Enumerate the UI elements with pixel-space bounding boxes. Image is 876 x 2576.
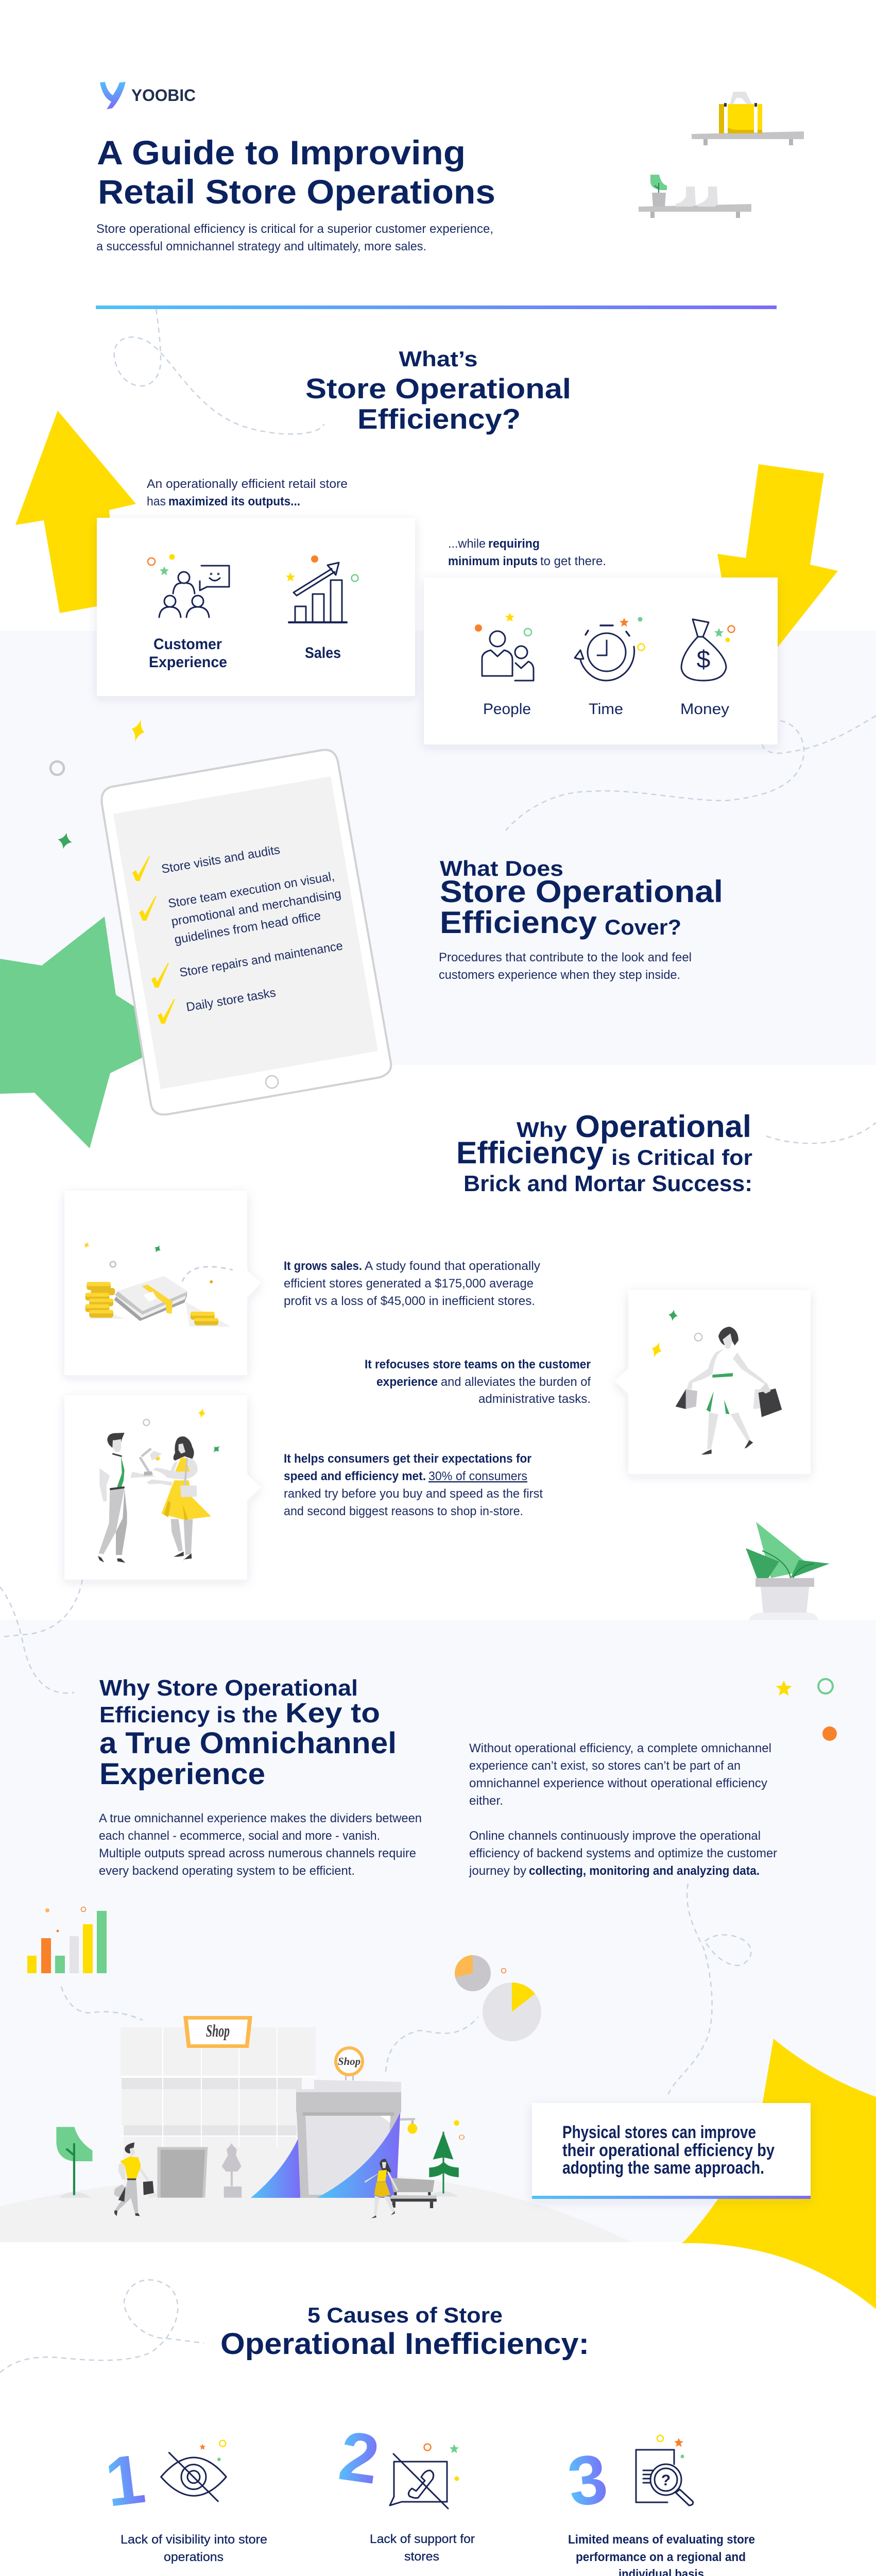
heading: why critical: is Critical for bbox=[611, 1145, 752, 1170]
heading: what does it cover: Store Operational bbox=[440, 874, 723, 909]
panel: shopper illustration bbox=[614, 1290, 811, 1474]
text: right paragraphs: omnichannel experience without operational efficiency bbox=[469, 1776, 767, 1790]
text: grows sales: efficient stores generated a $175,000 average bbox=[284, 1277, 534, 1291]
round sign: Shop bbox=[338, 2055, 360, 2067]
icon: people bbox=[475, 613, 534, 681]
heading: 5 causes bbox=[220, 2303, 589, 2361]
text: right paragraphs: efficiency of backend systems and optimize the customer bbox=[469, 1846, 777, 1860]
shop sign: Shop bbox=[206, 2022, 230, 2041]
text: refocus teams: It refocuses store teams on the customer bbox=[365, 1358, 591, 1371]
dashed lines: left of section four bbox=[0, 1580, 82, 1693]
text: grows sales: It grows sales. bbox=[284, 1259, 362, 1273]
text: inputs: minimum inputs bbox=[448, 554, 538, 568]
heading: key to omnichannel: a True Omnichannel bbox=[99, 1726, 397, 1760]
right building bbox=[296, 2080, 401, 2112]
title bbox=[97, 133, 495, 211]
text: grows sales bbox=[284, 1259, 540, 1308]
cause 3: limited evaluation bbox=[564, 2435, 755, 2576]
text: inputs bbox=[448, 537, 606, 568]
text: helps consumers: 30% of consumers bbox=[428, 1469, 527, 1483]
text: Lack of visibility into store bbox=[121, 2533, 267, 2547]
text: stores bbox=[404, 2550, 439, 2564]
text: helps consumers: speed and efficiency met. bbox=[284, 1469, 426, 1483]
icon: customer experience bbox=[148, 554, 229, 617]
text: helps consumers: and second biggest reasons to shop in-store. bbox=[284, 1504, 523, 1518]
text: procedures: Procedures that contribute to the look and feel bbox=[439, 951, 692, 964]
text: helps consumers bbox=[284, 1452, 543, 1518]
text: procedures bbox=[439, 951, 692, 982]
illustration: tablet checklist: Store repairs and maintenance bbox=[179, 939, 344, 980]
heading: key to omnichannel: Efficiency is the bbox=[99, 1702, 278, 1727]
illustration: tablet checklist: promotional and merchandising bbox=[170, 887, 342, 929]
title: A Guide to Improving bbox=[97, 133, 466, 172]
text: operations bbox=[164, 2550, 224, 2564]
text: Limited means of evaluating store bbox=[568, 2533, 755, 2547]
main building bbox=[121, 2027, 317, 2199]
text: Lack of support for bbox=[370, 2532, 475, 2546]
dashed line right bbox=[506, 716, 876, 831]
divider bbox=[96, 306, 777, 309]
text: grows sales: profit vs a loss of $45,000 in inefficient stores. bbox=[284, 1294, 535, 1308]
text: performance on a regional and bbox=[576, 2550, 746, 2564]
cause 1: lack of visibility bbox=[101, 2439, 267, 2564]
text: helps consumers: It helps consumers get their expectations for bbox=[284, 1452, 531, 1466]
heading: what does it cover: Cover? bbox=[605, 915, 681, 939]
labels: people, time, money: Money bbox=[680, 701, 729, 718]
text bbox=[370, 2532, 475, 2564]
callout: adopting the same approach. bbox=[562, 2158, 764, 2178]
text bbox=[568, 2533, 755, 2576]
illustration: shelves with bag, plant and boots bbox=[639, 92, 804, 218]
text: left paragraph: A true omnichannel experience makes the dividers between bbox=[99, 1811, 422, 1825]
heading: key to omnichannel: Experience bbox=[99, 1757, 265, 1791]
heading: what does it cover: Efficiency bbox=[440, 905, 597, 940]
heading: why critical: Operational bbox=[575, 1109, 751, 1144]
title: Retail Store Operations bbox=[98, 173, 495, 211]
number 3: 3 bbox=[564, 2439, 611, 2521]
heading: what does it cover bbox=[440, 856, 723, 940]
heading: why critical: Efficiency bbox=[456, 1136, 604, 1170]
text: left paragraph: Multiple outputs spread across numerous channels require bbox=[99, 1846, 416, 1860]
yellow arrow down bbox=[717, 464, 838, 693]
callout: Physical stores can improve bbox=[562, 2123, 756, 2142]
label: sales: Sales bbox=[305, 645, 341, 662]
heading: why critical bbox=[456, 1109, 752, 1196]
label: customer experience bbox=[149, 636, 227, 671]
panel: inputs bbox=[424, 578, 778, 744]
heading: what's store operational efficiency: Store Operational bbox=[305, 372, 571, 404]
yellow corner shape bbox=[681, 2039, 876, 2309]
illustration: tablet checklist: Daily store tasks bbox=[185, 986, 277, 1014]
labels: people, time, money: People bbox=[483, 701, 531, 718]
heading: key to omnichannel: Key to bbox=[285, 1698, 380, 1728]
number 2: 2 bbox=[335, 2416, 384, 2499]
bar chart bbox=[27, 1907, 107, 1973]
shop sign bbox=[183, 2016, 252, 2048]
green star shape bbox=[0, 917, 145, 1148]
illustration: store associate and customer bbox=[98, 1419, 222, 1563]
icon: crossed eye bbox=[161, 2441, 226, 2501]
icon: money: $ bbox=[697, 646, 710, 673]
text: refocus teams: and alleviates the burden of bbox=[441, 1375, 591, 1389]
heading: what's store operational efficiency: Efficiency? bbox=[357, 403, 521, 435]
text: refocus teams: administrative tasks. bbox=[478, 1392, 591, 1406]
text: helps consumers: ranked try before you buy and speed as the first bbox=[284, 1487, 543, 1501]
heading: what's store operational efficiency: What’s bbox=[399, 347, 478, 371]
dashed lines around store bbox=[61, 1884, 751, 2096]
heading: why critical: Why bbox=[517, 1117, 568, 1142]
decoration: sparkles bbox=[649, 1309, 678, 1359]
label: customer experience: Experience bbox=[149, 654, 227, 671]
text: refocus teams bbox=[365, 1358, 591, 1406]
text: left paragraph bbox=[99, 1811, 422, 1878]
labels: people, time, money bbox=[483, 701, 729, 718]
intro text: Store operational efficiency is critical for a superior customer experience, bbox=[96, 222, 493, 236]
icon: money bbox=[681, 619, 734, 681]
storefront, door and figures bbox=[56, 2112, 464, 2218]
heading: key to omnichannel: Why Store Operational bbox=[99, 1675, 358, 1701]
icon: document and magnifier bbox=[636, 2435, 693, 2505]
pie charts bbox=[455, 1955, 541, 2041]
illustration: tablet checklist bbox=[101, 750, 391, 1114]
intro text bbox=[96, 222, 493, 253]
ground hill bbox=[0, 2172, 631, 2242]
yellow arrow up bbox=[15, 411, 136, 613]
illustration: store building bbox=[56, 2016, 464, 2218]
illustration: tablet checklist: Store team execution on visual, bbox=[167, 869, 336, 911]
illustration: tablet checklist: Store visits and audits bbox=[161, 843, 281, 876]
heading: what does it cover: What Does bbox=[440, 856, 563, 880]
round sign bbox=[336, 2048, 363, 2080]
icon: document and magnifier: ? bbox=[661, 2472, 671, 2489]
intro text: a successful omnichannel strategy and ultimately, more sales. bbox=[96, 240, 426, 253]
decoration: yellow sparkle bbox=[197, 1408, 207, 1419]
labels: people, time, money: Time bbox=[589, 701, 623, 718]
cause 2: lack of support bbox=[335, 2416, 475, 2564]
decoration: star, ring, dot bbox=[776, 1679, 837, 1741]
section background: omnichannel bbox=[0, 1620, 876, 2242]
text: right paragraphs: journey by bbox=[469, 1864, 526, 1878]
text: inputs: to get there. bbox=[540, 554, 606, 568]
logo: YOOBIC bbox=[131, 86, 196, 105]
text: inputs: requiring bbox=[488, 537, 540, 551]
illustration: coins and banknotes bbox=[82, 1241, 233, 1327]
text: outputs: has bbox=[147, 495, 166, 509]
text: right paragraphs: Without operational efficiency, a complete omnichannel bbox=[469, 1741, 771, 1755]
text: right paragraphs: experience can’t exist, so stores can’t be part of an bbox=[469, 1759, 741, 1773]
heading: key to omnichannel bbox=[99, 1675, 397, 1791]
label: customer experience: Customer bbox=[153, 636, 222, 653]
panel: money illustration bbox=[64, 1191, 261, 1375]
illustration: woman with shopping bags bbox=[676, 1327, 782, 1454]
icon: crossed phone bbox=[390, 2444, 459, 2509]
number 1: 1 bbox=[101, 2439, 149, 2521]
text: left paragraph: each channel - ecommerce, social and more - vanish. bbox=[99, 1829, 380, 1843]
text: outputs: maximized its outputs... bbox=[168, 495, 300, 509]
text: inputs: ...while bbox=[448, 537, 486, 551]
dashed line with loop bbox=[114, 309, 324, 434]
text bbox=[121, 2533, 267, 2564]
logo bbox=[100, 82, 196, 109]
icon: time bbox=[575, 617, 645, 681]
panel: couple illustration bbox=[64, 1395, 261, 1580]
callout bbox=[532, 2103, 811, 2199]
text: right paragraphs: Online channels continuously improve the operational bbox=[469, 1829, 761, 1843]
heading: what's store operational efficiency bbox=[305, 347, 571, 435]
icon: sales bbox=[286, 555, 358, 622]
text: left paragraph: every backend operating system to be efficient. bbox=[99, 1864, 355, 1878]
text: right paragraphs: collecting, monitoring and analyzing data. bbox=[529, 1864, 760, 1878]
text: outputs: An operationally efficient retail store bbox=[147, 477, 348, 491]
illustration: potted plant bbox=[746, 1522, 830, 1620]
text: procedures: customers experience when they step inside. bbox=[439, 968, 680, 982]
callout: their operational efficiency by bbox=[562, 2141, 775, 2160]
panel: outputs bbox=[97, 518, 415, 696]
decoration: sparkles and ring bbox=[50, 718, 147, 851]
section background: what it covers bbox=[0, 631, 876, 1065]
text: right paragraphs: either. bbox=[469, 1794, 503, 1808]
dashed line: section three bbox=[766, 1123, 876, 1143]
heading: 5 causes: Operational Inefficiency: bbox=[220, 2327, 589, 2361]
text: outputs bbox=[147, 477, 348, 509]
dashed line: causes heading bbox=[0, 2280, 204, 2372]
illustration: tablet checklist: guidelines from head office bbox=[174, 909, 322, 947]
heading: why critical: Brick and Mortar Success: bbox=[463, 1171, 752, 1196]
text: right paragraphs bbox=[469, 1741, 777, 1878]
text: grows sales: A study found that operationally bbox=[365, 1259, 540, 1273]
text: refocus teams: experience bbox=[376, 1375, 438, 1389]
heading: 5 causes: 5 Causes of Store bbox=[307, 2303, 503, 2327]
